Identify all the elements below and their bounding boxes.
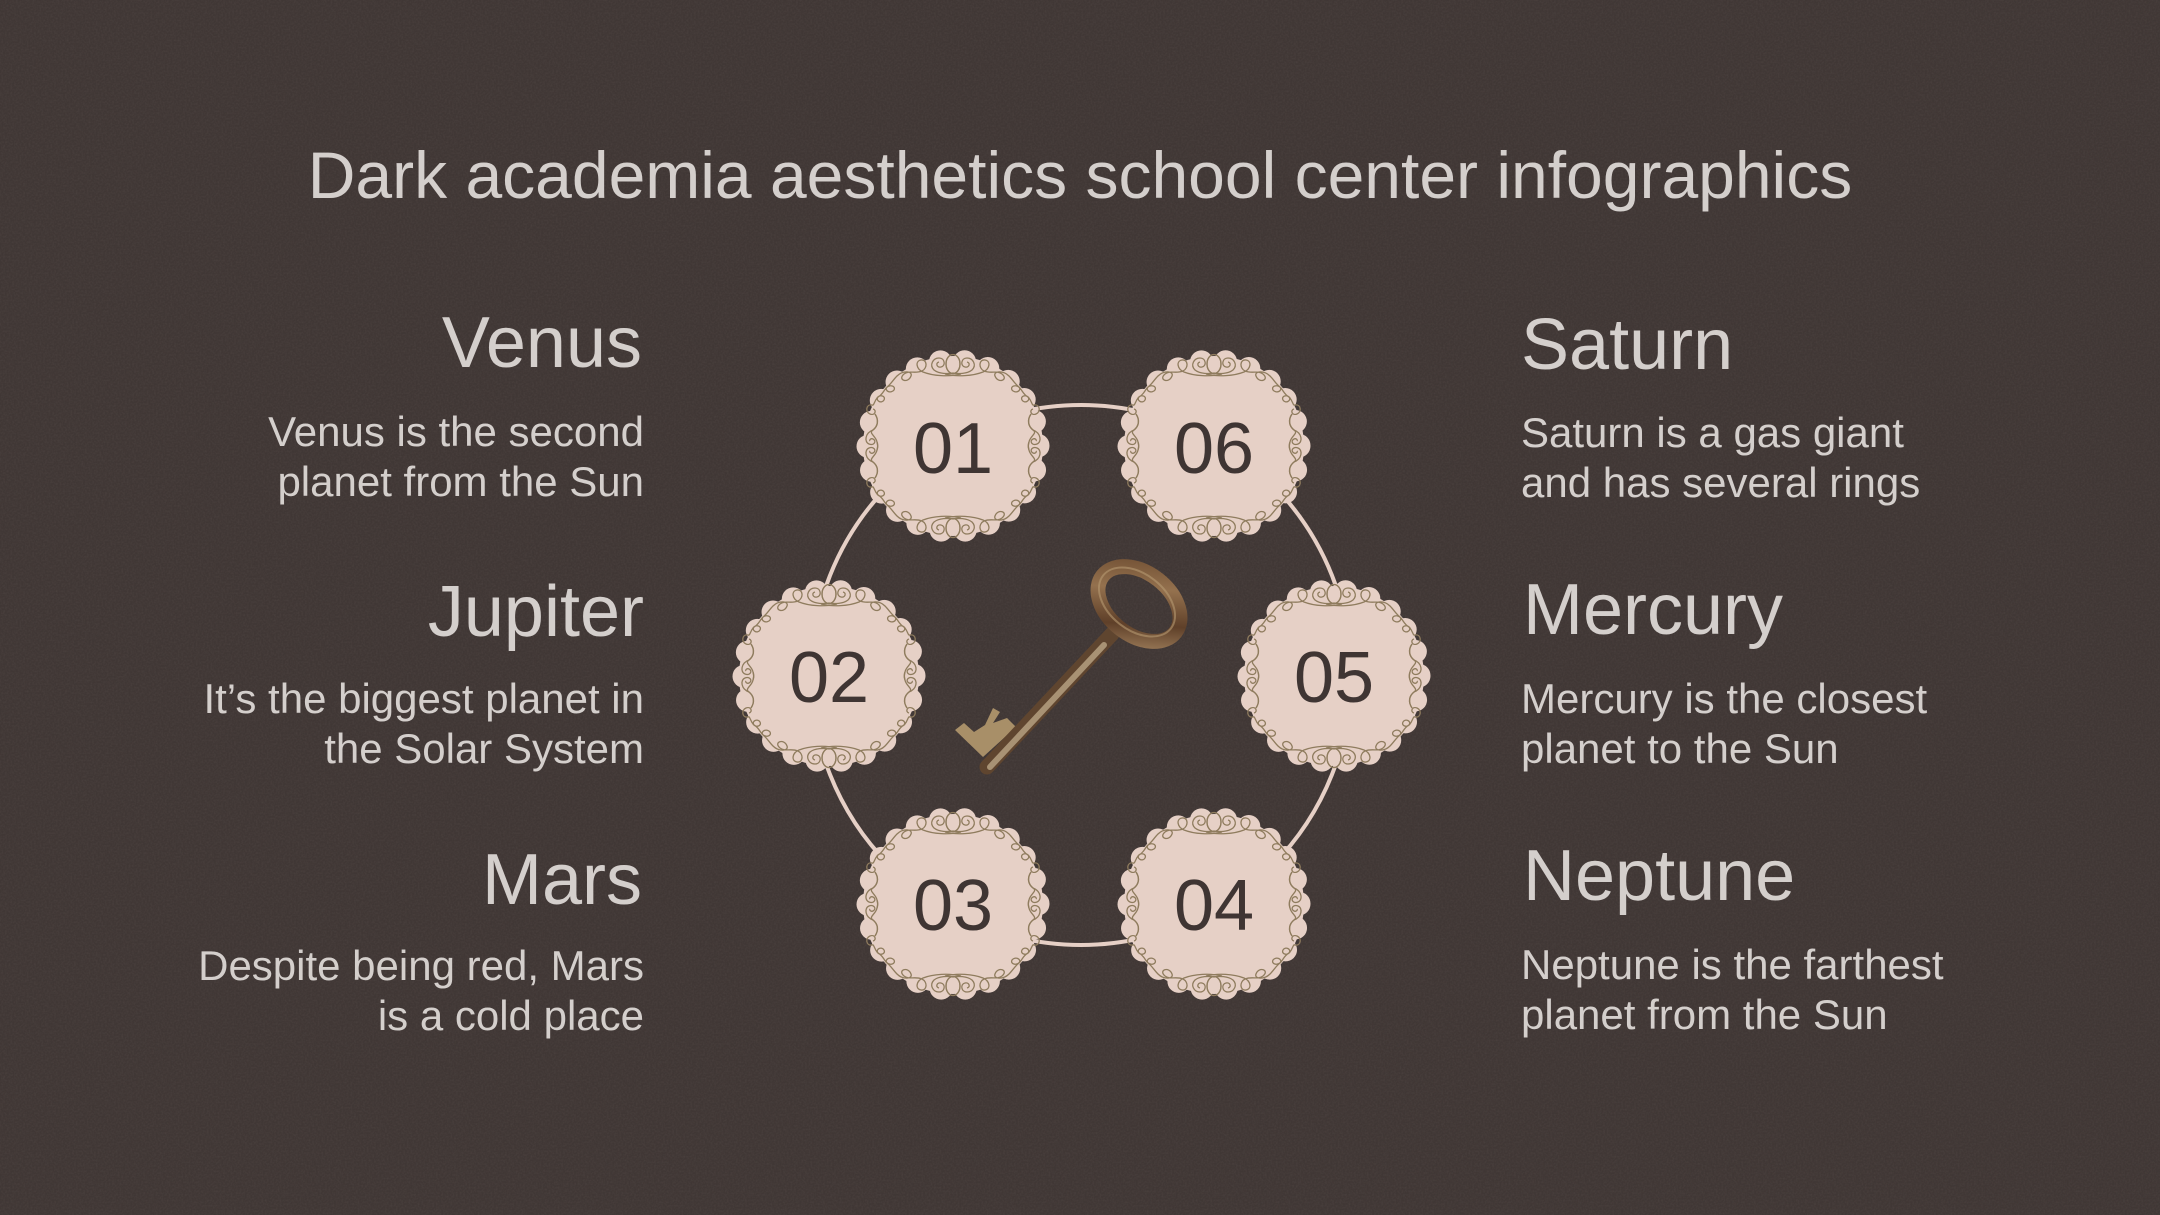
panel: Venus text: Venus [442, 303, 642, 383]
panel: Venus text: planet from the Sun [277, 458, 644, 505]
panel: Neptune text: Neptune is the farthest [1521, 941, 1944, 988]
panel: Jupiter text: the Solar System [324, 725, 644, 772]
panel: Neptune text: Neptune [1523, 836, 1795, 916]
panel: Mercury text [1521, 570, 1927, 772]
badge 05 [1244, 584, 1424, 768]
badge 02: 02 [789, 638, 869, 718]
panel: Neptune text [1521, 836, 1944, 1038]
badge 01: 01 [913, 409, 993, 489]
badge 05: 05 [1294, 638, 1374, 718]
badge 06 [1124, 354, 1304, 538]
panel: Mars text: Despite being red, Mars [198, 942, 644, 989]
panel: Venus text: Venus is the second [268, 408, 644, 455]
badge 03: 03 [913, 866, 993, 946]
panel: Mercury text: planet to the Sun [1521, 725, 1839, 772]
badge 06: 06 [1174, 409, 1254, 489]
panel: Jupiter text: It’s the biggest planet in [203, 675, 644, 722]
badge 04 [1124, 812, 1304, 996]
panel: Saturn text: and has several rings [1521, 459, 1920, 506]
panel: Saturn text [1521, 305, 1920, 506]
panel: Mercury text: Mercury is the closest [1521, 675, 1927, 722]
panel: Mercury text: Mercury [1523, 570, 1783, 650]
panel: Mars text: Mars [482, 840, 642, 920]
panel: Saturn text: Saturn [1521, 305, 1733, 385]
badge 02 [739, 584, 919, 768]
badge 01 [863, 354, 1043, 538]
title: Dark academia aesthetics school center infographics [308, 138, 1852, 212]
badge 04: 04 [1174, 866, 1254, 946]
panel: Mars text: is a cold place [378, 992, 644, 1039]
panel: Mars text [198, 840, 644, 1039]
panel: Jupiter text: Jupiter [428, 572, 644, 652]
badge 03 [863, 812, 1043, 996]
panel: Saturn text: Saturn is a gas giant [1521, 409, 1904, 456]
icon: antique key [955, 551, 1194, 767]
panel: Venus text [268, 303, 644, 505]
connecting ring [811, 405, 1351, 945]
panel: Jupiter text [203, 572, 644, 772]
panel: Neptune text: planet from the Sun [1521, 991, 1888, 1038]
